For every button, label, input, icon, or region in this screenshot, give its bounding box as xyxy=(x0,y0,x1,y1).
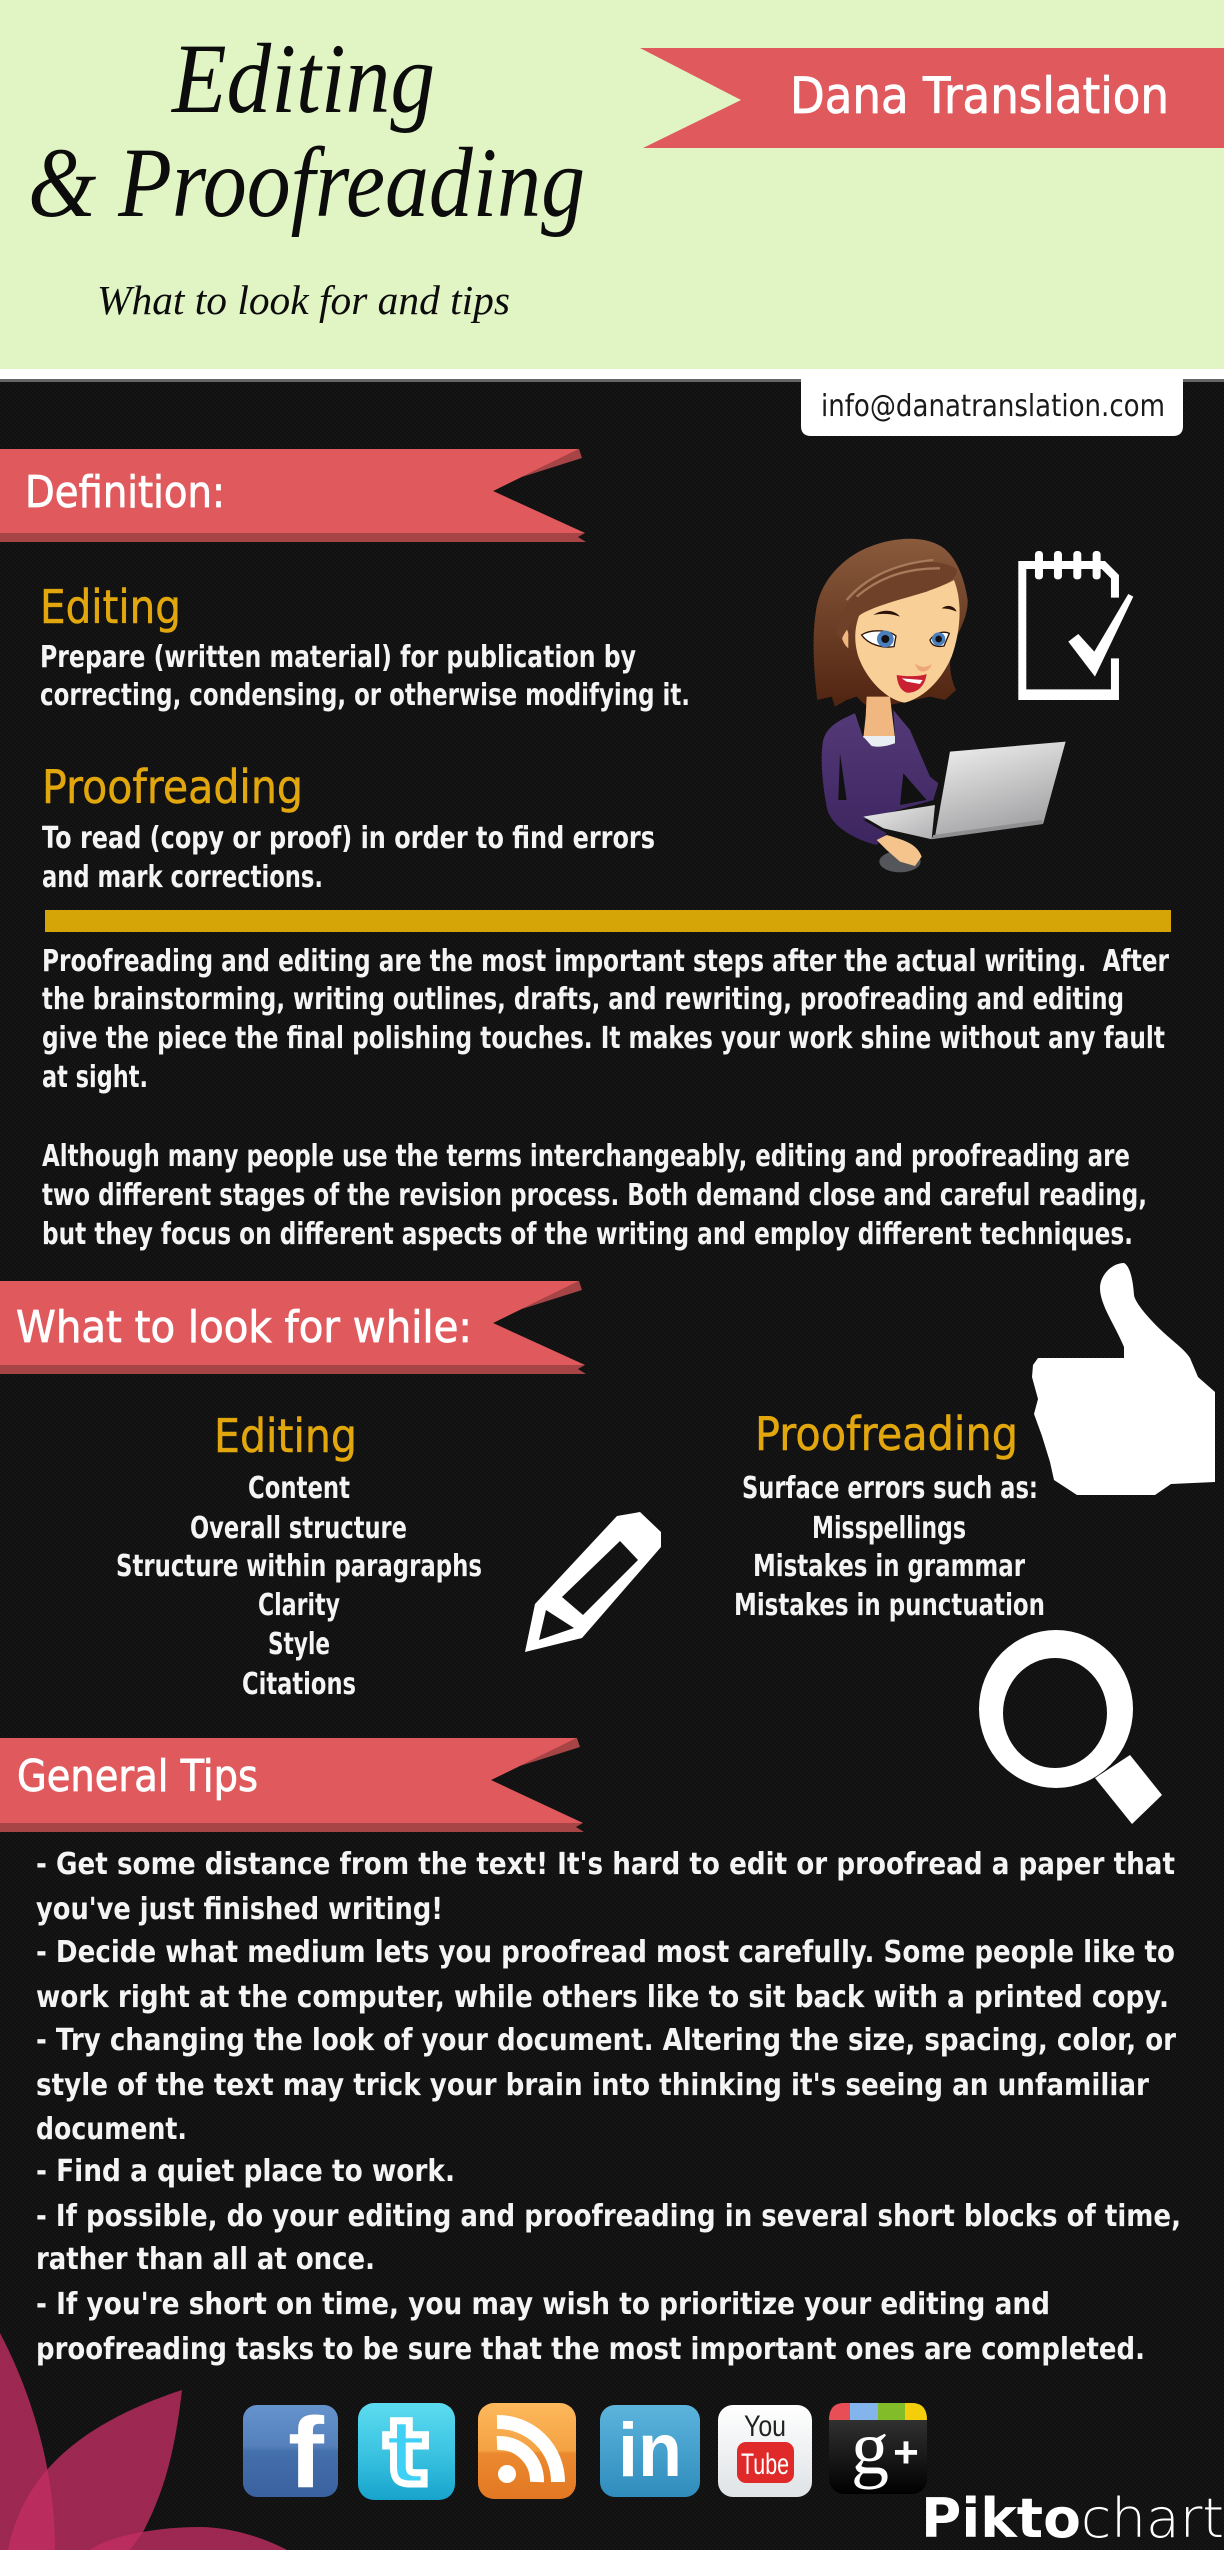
icon: youtube: You xyxy=(744,2410,786,2443)
icon: notepad with check mark xyxy=(1018,551,1133,700)
icon: google plus xyxy=(829,2403,927,2494)
what to look for: editing list: Style xyxy=(268,1627,330,1662)
neck xyxy=(863,697,895,738)
icon: thumbs up xyxy=(1032,1263,1215,1495)
what to look for: proofreading list: Misspellings xyxy=(812,1511,966,1546)
intro paragraphs xyxy=(42,944,1169,1252)
brand ribbon xyxy=(640,48,1224,148)
proofreading definition: and mark corrections. xyxy=(42,860,323,895)
what to look for: editing list: Content xyxy=(248,1471,350,1506)
definition text xyxy=(40,580,690,895)
mouth xyxy=(897,674,927,693)
header panel xyxy=(0,0,1224,382)
intro paragraphs: at sight. xyxy=(42,1060,148,1095)
what to look for: editing list: Clarity xyxy=(258,1588,340,1623)
icon: youtube xyxy=(718,2405,812,2497)
what to look for: editing list xyxy=(116,1409,482,1702)
what to look for: proofreading list: Mistakes in grammar xyxy=(753,1549,1025,1584)
icon: google plus: + xyxy=(893,2428,919,2477)
icon: facebook xyxy=(243,2397,338,2509)
eyes xyxy=(862,606,957,647)
laptop xyxy=(863,742,1066,839)
general tips text: - Find a quiet place to work. xyxy=(36,2154,455,2189)
piktochart logo: Piktochart xyxy=(921,2487,1224,2550)
ribbon: what to look for: What to look for while: xyxy=(16,1302,472,1353)
illustration: woman at laptop xyxy=(814,539,1066,872)
general tips text: rather than all at once. xyxy=(36,2242,375,2277)
divider bar xyxy=(45,910,1171,932)
icon: twitter: t xyxy=(384,2401,428,2506)
editing definition: Prepare (written material) for publication by xyxy=(40,640,636,675)
icon: youtube: Tube xyxy=(741,2448,789,2481)
nose xyxy=(915,663,932,672)
editing definition: correcting, condensing, or otherwise modifying it. xyxy=(40,678,690,713)
icon: pencil xyxy=(525,1512,661,1652)
what to look for: proofreading list xyxy=(734,1407,1045,1623)
what to look for: proofreading list: Mistakes in punctuation xyxy=(734,1588,1045,1623)
proofreading definition xyxy=(42,760,655,895)
decorative flower xyxy=(0,2333,287,2550)
general tips text xyxy=(36,1847,1181,2367)
social icons xyxy=(243,2397,927,2509)
ribbon: general tips: General Tips xyxy=(17,1751,258,1802)
icon: facebook: f xyxy=(288,2397,325,2509)
icon: linkedin: in xyxy=(618,2408,682,2493)
collar xyxy=(863,736,895,747)
face xyxy=(855,580,960,703)
main title: Editing xyxy=(170,23,435,134)
icon: rss xyxy=(478,2403,576,2499)
icon: linkedin xyxy=(600,2405,700,2497)
what to look for: editing list: Overall structure xyxy=(190,1511,407,1546)
brand ribbon: Dana Translation xyxy=(790,67,1169,125)
email tab xyxy=(801,369,1183,436)
email tab: info@danatranslation.com xyxy=(821,389,1165,424)
icon: twitter xyxy=(358,2401,455,2506)
proofreading definition: Proofreading xyxy=(42,760,303,814)
hand and mouse xyxy=(877,835,922,872)
icon: google plus: g xyxy=(851,2406,889,2490)
main title: & Proofreading xyxy=(28,127,585,238)
main title xyxy=(28,23,585,238)
ribbon: what to look for xyxy=(0,1281,586,1374)
ribbon: definition: Definition: xyxy=(25,467,225,518)
proofreading definition: To read (copy or proof) in order to find errors xyxy=(42,821,655,856)
what to look for: editing list: Citations xyxy=(242,1667,356,1702)
general tips text: you've just finished writing! xyxy=(36,1892,443,1927)
what to look for: proofreading list: Surface errors such as: xyxy=(742,1471,1038,1506)
what to look for: proofreading list: Proofreading xyxy=(755,1407,1018,1461)
ribbon: general tips xyxy=(0,1738,584,1832)
icon: magnifying glass xyxy=(979,1630,1162,1824)
editing definition xyxy=(40,580,690,713)
what to look for: editing list: Editing xyxy=(214,1409,357,1463)
forehead hair xyxy=(837,562,957,640)
general tips text: document. xyxy=(36,2112,187,2147)
purple sweater xyxy=(822,710,938,845)
editing definition: Editing xyxy=(40,580,181,634)
ribbon: definition xyxy=(0,449,586,542)
subtitle: What to look for and tips xyxy=(97,277,510,323)
what to look for: editing list: Structure within paragraphs xyxy=(116,1549,482,1584)
general tips text: - If you're short on time, you may wish to prioritize your editing and xyxy=(36,2287,1050,2322)
